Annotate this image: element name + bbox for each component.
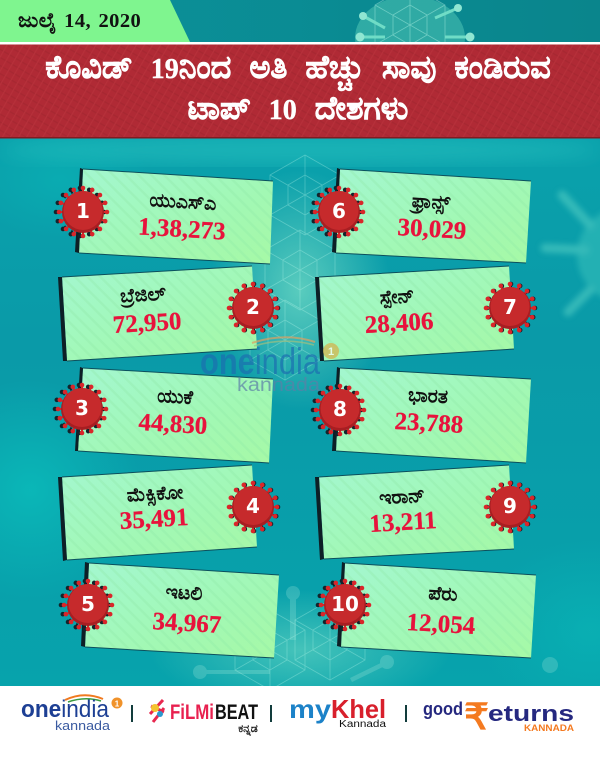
title banner: ಕೊವಿಡ್ 19ನಿಂದ ಅತಿ ಹೆಚ್ಚು ಸಾವು ಕಂಡಿರುವ xyxy=(45,49,551,92)
card 8: India: 8 xyxy=(333,397,347,421)
card 8: India: 23,788 xyxy=(394,408,464,439)
logo: oneindia kannada: 1 xyxy=(115,700,120,708)
logo: goodreturns: eturns xyxy=(488,701,574,726)
card 6: France xyxy=(310,168,531,263)
card 4: Mexico: 4 xyxy=(246,494,260,518)
card 4: Mexico: 35,491 xyxy=(119,504,189,535)
card 9: Iran: ಇರಾನ್ xyxy=(379,486,426,509)
card 9: Iran: 13,211 xyxy=(369,507,438,538)
watermark: oneindia kannada xyxy=(200,337,339,396)
card 1: USA xyxy=(54,168,273,264)
card 5: Italy: 34,967 xyxy=(152,608,222,639)
footer band xyxy=(0,686,600,757)
logo: mykhel xyxy=(289,694,387,730)
logo: oneindia kannada: oneindia xyxy=(21,696,110,723)
card 10: Peru xyxy=(316,562,536,658)
logo: mykhel: my xyxy=(289,694,332,724)
logo: goodreturns: ₹ xyxy=(464,696,489,737)
card 5: Italy: ಇಟಲಿ xyxy=(165,582,203,605)
logo: goodreturns: good xyxy=(423,699,463,719)
card 2: Brazil xyxy=(58,266,280,361)
card 7: Spain: ಸ್ಪೇನ್ xyxy=(379,286,415,309)
card 7: Spain: 28,406 xyxy=(364,308,434,339)
logo: mykhel: Kannada xyxy=(339,719,387,730)
card 10: Peru: ಪೆರು xyxy=(428,583,458,606)
card 8: India xyxy=(311,367,531,463)
logo: goodreturns xyxy=(423,696,574,737)
divider xyxy=(405,705,407,722)
card 5: Italy xyxy=(59,562,279,658)
card 2: Brazil: ಬ್ರೆಜಿಲ್ xyxy=(118,284,167,308)
card 9: Iran xyxy=(315,465,537,560)
logo: filmibeat: BEAT xyxy=(215,701,258,724)
card 3: UK xyxy=(53,367,273,463)
logo: mykhel: Khel xyxy=(331,694,386,724)
title banner: ಟಾಪ್ 10 ದೇಶಗಳು xyxy=(188,90,408,126)
card 1: USA: 1 xyxy=(76,199,90,223)
card 1: USA: 1,38,273 xyxy=(137,213,226,246)
card 3: UK: 44,830 xyxy=(138,409,208,440)
card 2: Brazil: 2 xyxy=(246,295,260,319)
card 4: Mexico xyxy=(58,465,280,561)
card 2: Brazil: 72,950 xyxy=(112,308,182,339)
card 6: France: 6 xyxy=(332,199,346,223)
title banner xyxy=(0,42,600,138)
logo: filmibeat xyxy=(150,700,258,736)
top strip with virus xyxy=(0,0,600,80)
date tab: ಜುಲೈ 14, 2020 xyxy=(18,10,141,35)
card 10: Peru: 10 xyxy=(331,592,359,616)
watermark: oneindia kannada: kannada xyxy=(237,375,320,396)
card 6: France: ಫ್ರಾನ್ಸ್ xyxy=(408,191,452,216)
divider xyxy=(131,705,133,722)
divider xyxy=(270,705,272,722)
logo: goodreturns: KANNADA xyxy=(524,723,574,734)
background virus: bottom arms xyxy=(193,586,558,682)
logo: oneindia kannada: kannada xyxy=(55,718,111,733)
card 6: France: 30,029 xyxy=(397,214,467,245)
date tab xyxy=(0,0,190,42)
watermark: oneindia kannada: oneindia xyxy=(200,341,320,382)
card 4: Mexico: ಮೆಕ್ಸಿಕೋ xyxy=(126,482,184,508)
card 10: Peru: 12,054 xyxy=(406,609,477,640)
card 3: UK: ಯುಕೆ xyxy=(157,386,195,409)
background virus: right xyxy=(545,195,600,312)
card 7: Spain xyxy=(315,266,537,361)
card 9: Iran: 9 xyxy=(503,494,517,518)
card 5: Italy: 5 xyxy=(81,592,95,616)
background virus: centre net xyxy=(235,155,365,690)
logo: filmibeat: ಕನ್ನಡ xyxy=(238,723,258,736)
watermark: oneindia kannada: 1 xyxy=(328,346,334,358)
card 8: India: ಭಾರತ xyxy=(407,385,448,408)
logo: oneindia kannada xyxy=(21,695,122,733)
card 3: UK: 3 xyxy=(75,396,89,420)
card 7: Spain: 7 xyxy=(503,295,517,319)
logo: filmibeat: FiLMi xyxy=(170,701,214,724)
card 1: USA: ಯುಎಸ್‌ಎ xyxy=(149,190,217,215)
